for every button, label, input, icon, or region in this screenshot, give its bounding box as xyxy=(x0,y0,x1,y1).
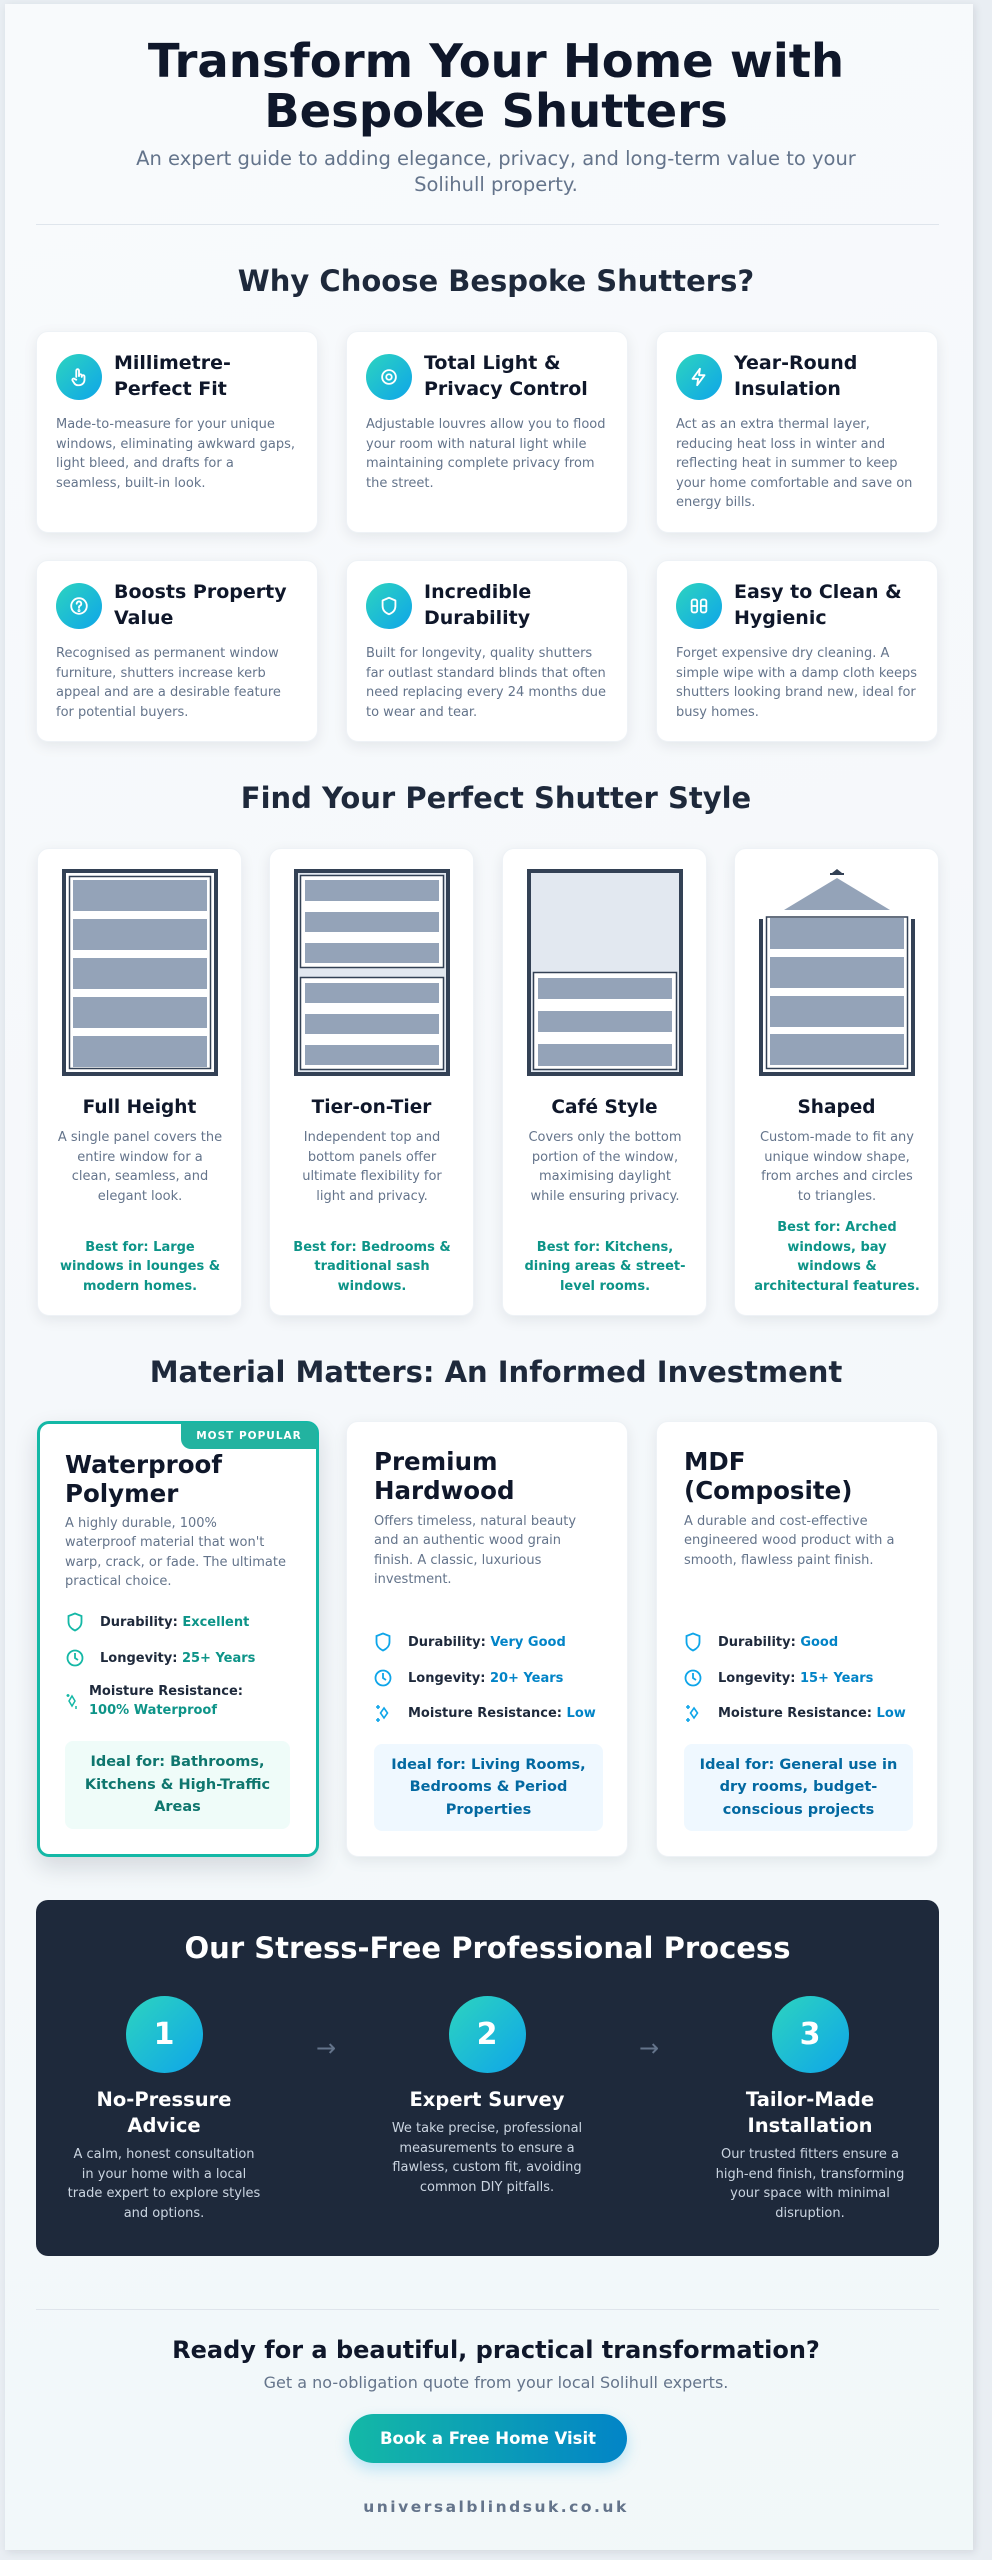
ideal for xyxy=(374,1744,603,1831)
material text: Offers timeless, natural beauty and an authentic wood grain finish. A classic, luxurious investment. xyxy=(374,1514,576,1587)
style title: Tier-on-Tier xyxy=(312,1097,431,1118)
step 1 text: A calm, honest consultation in your home with a local trade expert to explore styles and options. xyxy=(68,2147,260,2220)
card text: Made-to-measure for your unique windows, eliminating awkward gaps, light bleed, and drafts for a seamless, built-in look. xyxy=(56,417,295,491)
card title: Hygienic xyxy=(734,607,827,629)
card text: Adjustable louvres allow you to flood your room with natural light while maintaining complete privacy from the street. xyxy=(366,417,606,491)
process heading: Our Stress-Free Professional Process xyxy=(185,1931,790,1965)
best for: architectural features. xyxy=(754,1278,920,1294)
card title: Year-Round xyxy=(734,352,857,374)
step 1 number xyxy=(126,1996,202,2073)
step 2 number: 2 xyxy=(477,2017,497,2052)
card title xyxy=(114,581,287,629)
stat: durability xyxy=(68,1612,250,1632)
stat: longevity: Longevity: 25+ Years xyxy=(100,1650,255,1666)
cta heading: Ready for a beautiful, practical transformation? xyxy=(172,2336,820,2364)
card title: Durability xyxy=(424,607,530,629)
card title xyxy=(114,352,231,400)
panel: year-round insulation xyxy=(656,331,938,533)
card text: Forget expensive dry cleaning. A simple wipe with a damp cloth keeps shutters looking brand new, ideal for busy homes. xyxy=(676,646,917,720)
step 2 number xyxy=(448,1996,526,2073)
arrow 1: → xyxy=(316,2034,336,2062)
step 1 text: No-Pressure xyxy=(97,2088,231,2111)
panel: premium hardwood xyxy=(346,1421,628,1857)
subtitle: An expert guide to adding elegance, privacy, and long-term value to your xyxy=(136,147,856,170)
panel: process xyxy=(36,1900,939,2256)
material text: A highly durable, 100% waterproof material that won't warp, crack, or fade. The ultimate practical choice. xyxy=(65,1516,286,1589)
cta button xyxy=(349,2414,627,2463)
style title: Full Height xyxy=(83,1097,196,1118)
stat: moisture: Moisture Resistance: Low xyxy=(718,1706,906,1720)
panel: tier-on-tier xyxy=(269,848,474,1316)
step 2 text xyxy=(392,2088,582,2194)
stat: moisture: Moisture Resistance: xyxy=(89,1684,243,1699)
material title: Polymer xyxy=(65,1479,178,1508)
panel: full height xyxy=(37,848,242,1316)
stat: moisture: Moisture Resistance: Low xyxy=(408,1706,596,1720)
style title: Shaped xyxy=(797,1097,876,1118)
card text: Act as an extra thermal layer, reducing heat loss in winter and reflecting heat in summer to keep your home comfortable and save on energy bills. xyxy=(676,417,912,510)
stat: longevity: Longevity: 15+ Years xyxy=(718,1670,873,1686)
heading: material matters: Material Matters: An Informed Investment xyxy=(150,1355,842,1389)
heading: shutter style: Find Your Perfect Shutter Style xyxy=(241,781,751,815)
badge: most popular xyxy=(181,1423,317,1449)
panel: total light & privacy xyxy=(346,331,628,533)
material title: MDF xyxy=(684,1447,745,1476)
badge: most popular: MOST POPULAR xyxy=(196,1430,302,1442)
material text: A durable and cost-effective engineered wood product with a smooth, flawless paint finish. xyxy=(684,1514,895,1568)
material title: Premium xyxy=(374,1447,498,1476)
style text: Custom-made to fit any unique window shape, from arches and circles to triangles. xyxy=(760,1130,914,1204)
material title xyxy=(65,1450,222,1508)
panel: boosts property value xyxy=(36,560,318,742)
card text: Recognised as permanent window furniture, shutters increase kerb appeal and are a desirable feature for potential buyers. xyxy=(56,646,281,720)
style text: Covers only the bottom portion of the window, maximising daylight while ensuring privacy. xyxy=(528,1130,682,1204)
title: Transform Your Home with xyxy=(148,34,844,88)
card text: Built for longevity, quality shutters far outlast standard blinds that often need replacing every 24 months due to wear and tear. xyxy=(366,646,606,720)
style text: A single panel covers the entire window for a clean, seamless, and elegant look. xyxy=(58,1130,222,1204)
best for: windows, bay xyxy=(787,1240,887,1254)
best for: Best for: Large windows in lounges & modern homes. xyxy=(60,1240,220,1294)
panel: cafe style xyxy=(502,848,707,1316)
card title: Insulation xyxy=(734,378,841,400)
icon: eye xyxy=(366,354,412,400)
icon: cafe window xyxy=(527,869,683,1076)
card title xyxy=(734,352,857,400)
cta subtext: Get a no-obligation quote from your local Solihull experts. xyxy=(264,2373,728,2392)
best for xyxy=(754,1220,920,1294)
stat: moisture: 100% Waterproof xyxy=(89,1703,217,1718)
best for: Best for: Arched xyxy=(777,1220,897,1235)
icon: bolt xyxy=(676,354,722,400)
panel: easy to clean xyxy=(656,560,938,742)
step 3 text xyxy=(716,2088,904,2220)
step 2 text: We take precise, professional measurements to ensure a flawless, custom fit, avoiding common DIY pitfalls. xyxy=(392,2121,582,2194)
step 3 text: Installation xyxy=(747,2114,873,2137)
icon: tier window xyxy=(294,869,450,1076)
best for: Best for: Bedrooms & traditional sash windows. xyxy=(293,1240,451,1294)
step 2 text: Expert Survey xyxy=(409,2088,564,2111)
style text: Independent top and bottom panels offer ultimate flexibility for light and privacy. xyxy=(302,1130,442,1204)
ideal for: Ideal for: Living Rooms, Bedrooms & Period Properties xyxy=(391,1757,586,1818)
ideal for: Ideal for: General use in dry rooms, budget-conscious projects xyxy=(700,1757,897,1818)
step 3 number xyxy=(772,1996,848,2073)
stat: durability: Durability: Very Good xyxy=(408,1634,566,1650)
subtitle xyxy=(136,147,856,196)
material title: Waterproof xyxy=(65,1450,222,1479)
icon: shield xyxy=(366,583,412,629)
card title: Incredible xyxy=(424,581,531,603)
material title xyxy=(374,1447,514,1505)
card title: Boosts Property xyxy=(114,581,287,603)
footer url: universalblindsuk.co.uk xyxy=(363,2498,629,2516)
card title: Total Light & xyxy=(424,352,561,374)
card title: Millimetre- xyxy=(114,352,231,374)
card title xyxy=(424,352,588,400)
style title: Café Style xyxy=(551,1097,658,1118)
cta button: Book a Free Home Visit xyxy=(380,2429,596,2448)
icon: cleaning xyxy=(676,583,722,629)
icon: hand xyxy=(56,354,102,400)
arrow 2: → xyxy=(639,2034,659,2062)
panel: waterproof polymer xyxy=(37,1421,319,1857)
card title xyxy=(424,581,531,629)
heading: why choose: Why Choose Bespoke Shutters? xyxy=(238,264,754,298)
ideal for: Ideal for: Bathrooms, Kitchens & High-Traffic Areas xyxy=(85,1754,270,1815)
icon: shaped window xyxy=(759,869,915,1076)
stat: durability xyxy=(376,1632,566,1652)
stat: moisture xyxy=(66,1684,243,1718)
best for: windows & xyxy=(797,1259,877,1274)
step 1 text xyxy=(68,2088,260,2220)
subtitle: Solihull property. xyxy=(414,173,578,196)
ideal for xyxy=(684,1744,913,1831)
panel: millimetre-perfect fit xyxy=(36,331,318,533)
step 3 text: Our trusted fitters ensure a high-end finish, transforming your space with minimal disruption. xyxy=(716,2147,904,2220)
material title: (Composite) xyxy=(684,1476,852,1505)
icon: question xyxy=(56,583,102,629)
title xyxy=(148,34,844,138)
stat: durability: Durability: Good xyxy=(718,1634,838,1650)
panel: incredible durability xyxy=(346,560,628,742)
step 1 text: Advice xyxy=(127,2114,201,2137)
card title: Easy to Clean & xyxy=(734,581,902,603)
best for: Best for: Kitchens, dining areas & street-level rooms. xyxy=(524,1240,686,1294)
title: Bespoke Shutters xyxy=(264,84,728,138)
stat: durability: Durability: Excellent xyxy=(100,1614,249,1630)
card title xyxy=(734,581,902,629)
material title xyxy=(684,1447,852,1505)
card title: Privacy Control xyxy=(424,378,588,400)
card title: Value xyxy=(114,607,173,629)
icon: full height window xyxy=(62,869,218,1076)
step 3 number: 3 xyxy=(800,2017,820,2052)
step 3 text: Tailor-Made xyxy=(746,2088,874,2111)
panel: mdf composite xyxy=(656,1421,938,1857)
panel: shaped xyxy=(734,848,939,1316)
stat: longevity: Longevity: 20+ Years xyxy=(408,1670,563,1686)
ideal for xyxy=(65,1741,290,1829)
stat: durability xyxy=(686,1632,838,1652)
card title: Perfect Fit xyxy=(114,378,227,400)
material title: Hardwood xyxy=(374,1476,514,1505)
step 1 number: 1 xyxy=(154,2017,174,2052)
